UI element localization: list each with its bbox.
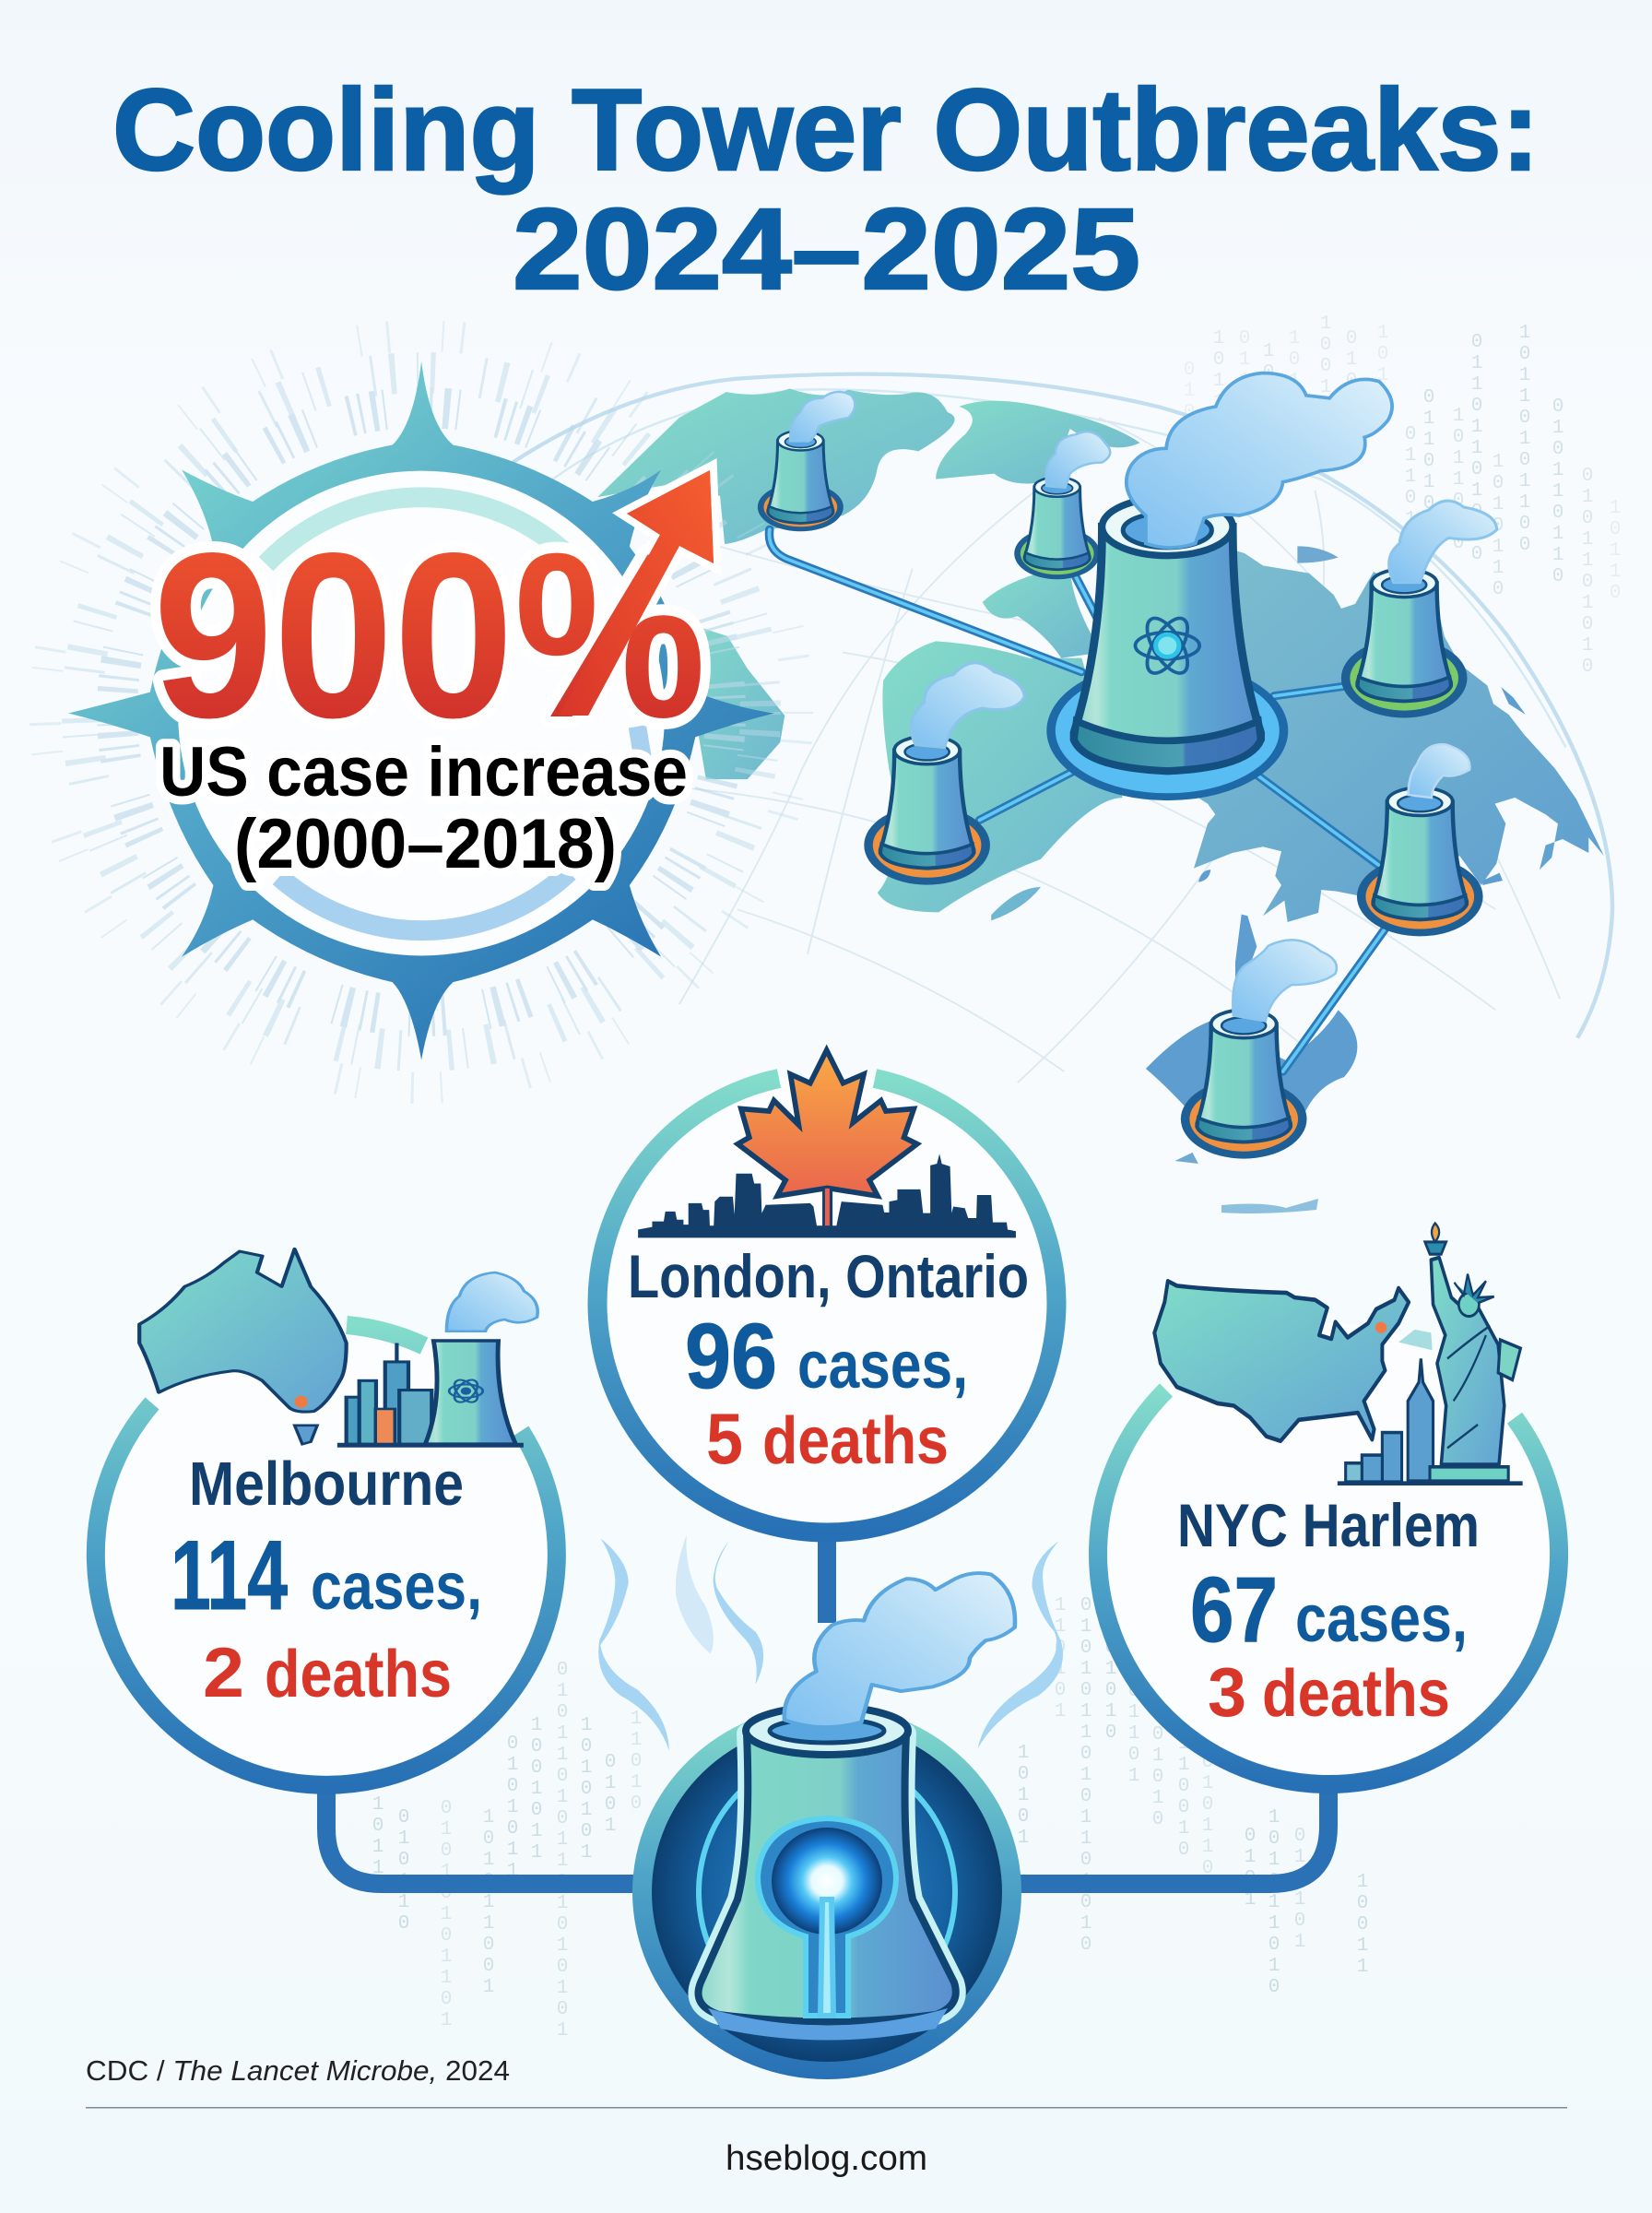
- connectors to central reactor: [326, 1533, 1328, 1884]
- small tower: north west: [758, 431, 844, 531]
- binary data streams: top right: 10110101100: [1514, 323, 1536, 556]
- title: [112, 66, 1540, 314]
- footer: website: hseblog.com: [726, 2139, 927, 2178]
- continent: Asia landmass: [1152, 544, 1604, 984]
- binary data streams: top right: 010110: [1340, 328, 1363, 456]
- binary data streams: bottom: 010110101101010101: [551, 1660, 573, 2041]
- badge: 900% statistic: [68, 361, 774, 1060]
- reactor rim: [746, 1707, 908, 1755]
- panel: London, Ontario: cases,: [797, 1329, 968, 1402]
- binary data streams: bottom: 01010: [1147, 1724, 1169, 1830]
- smoke plume: east: [1389, 501, 1497, 583]
- binary data streams: bottom: 101101: [1123, 1660, 1145, 1787]
- panel: NYC Harlem: deaths: [1262, 1657, 1450, 1731]
- central hub tower: [1046, 498, 1288, 800]
- label: NYC Harlem: [1177, 1491, 1480, 1559]
- stat: deaths: 5: [706, 1398, 743, 1479]
- ring: [597, 1079, 1056, 1533]
- bottom edge islands: [1221, 1199, 1318, 1213]
- icon: Australia and city: [139, 1249, 537, 1445]
- radial data rays: [45, 336, 797, 1088]
- keyhole core: [758, 1818, 896, 2016]
- binary data streams: top right: 01101101010: [1466, 332, 1488, 565]
- binary data streams: bottom: [367, 1595, 1374, 2041]
- smoke plume: central reactor: [785, 1573, 1015, 1727]
- tower: south: [1181, 1010, 1307, 1159]
- skyline: [347, 1397, 372, 1444]
- hub smoke plume: [1127, 373, 1392, 548]
- binary data streams: bottom: 01010101101: [435, 1798, 457, 2031]
- tower: south east: [1357, 787, 1483, 936]
- arrow shaft over percent: [559, 470, 714, 716]
- tower: west: [864, 736, 990, 885]
- panel: NYC Harlem: cases,: [1295, 1582, 1468, 1656]
- stat: cases: 114: [171, 1520, 288, 1630]
- smoke plume: north west: [790, 392, 855, 442]
- icon: central reactor: [632, 1705, 1021, 2079]
- binary data streams: bottom: 011010: [625, 1687, 647, 1815]
- binary data streams: bottom: 101011001: [478, 1807, 500, 1998]
- badge: 900% statistic: (2000–2018): [234, 805, 617, 883]
- binary data streams: bottom: 010110: [393, 1807, 415, 1935]
- binary data streams: top right: 0101: [1178, 360, 1200, 444]
- icon: USA map and Statue of Liberty: [1154, 1224, 1523, 1484]
- stat: deaths: 3: [1208, 1653, 1246, 1731]
- panel: Melbourne: deaths: [265, 1638, 452, 1711]
- statue: [1431, 1258, 1504, 1464]
- binary data streams: bottom: 10011: [1351, 1872, 1374, 1978]
- binary data streams: bottom: 010101: [1289, 1826, 1311, 1953]
- world map globe: [504, 374, 1612, 1164]
- binary data streams: bottom: 0101: [1239, 1826, 1261, 1911]
- binary data streams: top right: 1011: [1283, 328, 1305, 413]
- ring: [96, 1325, 557, 1785]
- skyline: [1408, 1358, 1434, 1481]
- smoke plume: south east: [1409, 744, 1469, 798]
- icon: maple leaf and skyline: [638, 1050, 1016, 1237]
- binary data streams: top right: 1011: [1208, 328, 1230, 413]
- continents: [597, 389, 1357, 1164]
- title: 2024–2025: [513, 185, 1140, 314]
- network of cooling towers: [758, 373, 1497, 1159]
- binary data streams: top right: 0110101: [1418, 387, 1440, 536]
- cyan inner arcs: [699, 1756, 955, 2029]
- reactor body: [699, 1734, 956, 2021]
- binary data streams: bottom: 010110: [1197, 1752, 1219, 1879]
- binary data streams: top right: 011010: [1233, 328, 1256, 456]
- heat wisps: [598, 1534, 1063, 1751]
- binary data streams: top right: 10110: [1604, 498, 1626, 604]
- binary data streams: bottom: 0101: [599, 1752, 621, 1837]
- binary data streams: top right: 1010110: [1488, 452, 1508, 600]
- binary data streams: top right: 10011: [1315, 314, 1337, 420]
- ring: [1098, 1391, 1559, 1784]
- binary data streams: bottom: 0101011: [502, 1734, 524, 1882]
- caption: US case increase: [159, 733, 688, 811]
- connector lines: [769, 529, 1385, 1071]
- binary data streams: top right: [1178, 314, 1626, 678]
- panel: London, Ontario: [597, 1050, 1056, 1533]
- small cooling tower: [425, 1341, 515, 1444]
- big number: 900%: [153, 504, 706, 767]
- binary data streams: bottom: 01010110101101010: [1075, 1595, 1097, 1956]
- binary data streams: bottom: 1010101: [575, 1715, 597, 1864]
- tower: east: [1341, 569, 1468, 717]
- title: Cooling Tower Outbreaks:: [112, 66, 1540, 195]
- binary data streams: bottom: 0101010: [1101, 1595, 1121, 1744]
- arrow: [559, 470, 714, 716]
- small tower: north: [1014, 478, 1100, 579]
- stat: cases: 67: [1190, 1558, 1278, 1662]
- label: London, Ontario: [628, 1242, 1029, 1310]
- footer divider: [86, 2107, 1567, 2108]
- panel: London, Ontario: deaths: [762, 1404, 949, 1478]
- panel: Melbourne: [96, 1249, 557, 1785]
- panel: NYC Harlem: [1098, 1224, 1559, 1784]
- binary data streams: top right: 1001: [1257, 341, 1280, 426]
- star ring: [68, 361, 774, 1060]
- source citation: CDC / The Lancet Microbe, 2024: [86, 2054, 510, 2087]
- binary data streams: bottom: 10101: [1012, 1743, 1034, 1849]
- binary data streams: bottom: 101011: [367, 1752, 389, 1879]
- binary data streams: bottom: 110101: [1049, 1595, 1071, 1722]
- binary data streams: bottom: 0101: [951, 1780, 974, 1864]
- binary data streams: bottom: 101011010: [1263, 1807, 1285, 1998]
- binary data streams: top right: 010110110: [1547, 396, 1569, 587]
- panel: Melbourne: cases,: [311, 1550, 482, 1624]
- binary data streams: top right: 0101101010: [1576, 466, 1599, 678]
- globe outline and grid: [504, 374, 1612, 1083]
- stat: deaths: 2: [203, 1634, 244, 1712]
- binary data streams: bottom: 1001011: [525, 1715, 548, 1864]
- binary data streams: bottom: 110010: [1173, 1734, 1195, 1861]
- binary data streams: top right: 011010: [1399, 424, 1422, 551]
- label: Melbourne: [189, 1450, 464, 1519]
- smoke plume: south: [1233, 940, 1337, 1022]
- smoke plume: west: [911, 663, 1024, 748]
- binary data streams: top right: 1011010: [1447, 406, 1469, 554]
- binary data streams: top right: 1011: [1372, 323, 1394, 408]
- smoke plume: north: [1046, 432, 1110, 488]
- atom symbol: [1136, 612, 1199, 679]
- stat: cases: 96: [685, 1305, 777, 1408]
